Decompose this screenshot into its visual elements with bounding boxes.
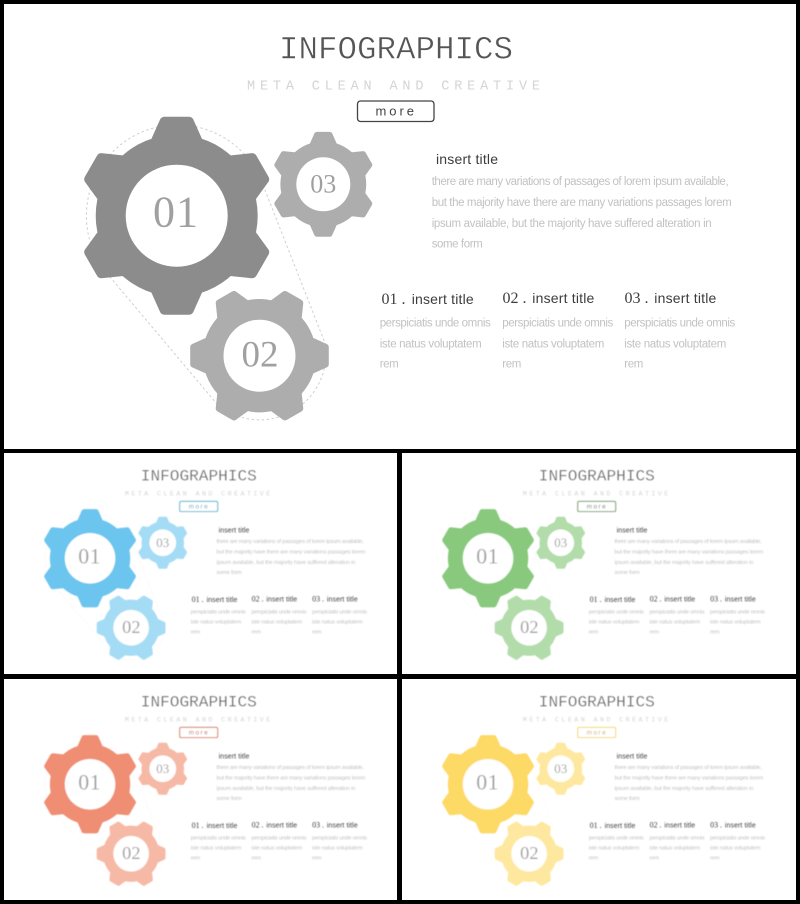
text block: column 03: iste natus voluptatem: [624, 338, 726, 350]
text block: insert title: ipsum available, but the majority have suffered alteration in: [217, 560, 355, 566]
text block: column 03: [624, 290, 736, 371]
text block: column 01: insert title: [412, 291, 474, 307]
text block: column 01: [191, 595, 246, 636]
text block: column 02: perspiciatis unde omnis: [502, 318, 614, 330]
dashed outline around gears: [443, 513, 562, 660]
icon: gear 02: [84, 807, 178, 901]
icon: gear 03: 03: [310, 170, 336, 199]
panel: grey infographic: [4, 4, 796, 450]
text block: insert title: there are many variations of passages of lorem ipsum available,: [217, 765, 364, 771]
more button: [180, 727, 218, 738]
text block: column 02: [650, 821, 705, 862]
text block: column 01: 01 .: [590, 821, 602, 830]
text block: column 02: [502, 290, 614, 371]
title: INFOGRAPHICS: [141, 693, 257, 711]
text block: column 02: 02 .: [502, 290, 526, 307]
panel: yellow infographic: [402, 679, 796, 901]
text block: column 03: perspiciatis unde omnis: [624, 318, 736, 330]
text block: column 02: [252, 595, 307, 636]
text block: column 01: perspiciatis unde omnis: [589, 835, 644, 841]
text block: column 01: iste natus voluptatem: [191, 846, 242, 852]
icon: gear 02: 02: [122, 617, 141, 637]
text block: column 01: iste natus voluptatem: [380, 338, 482, 350]
text block: column 01: rem: [380, 359, 399, 371]
icon: gear 02: [482, 807, 576, 901]
text block: insert title: there are many variations of passages of lorem ipsum available,: [615, 765, 762, 771]
text block: column 03: perspiciatis unde omnis: [312, 609, 367, 615]
text block: column 02: insert title: [664, 823, 695, 830]
text block: insert title: [432, 151, 732, 250]
text block: insert title: ipsum available, but the majority have suffered alteration in: [217, 786, 355, 792]
title: INFOGRAPHICS: [279, 32, 513, 68]
text block: insert title: [217, 754, 366, 802]
text block: column 03: insert title: [654, 290, 717, 306]
text block: column 02: [650, 595, 705, 636]
icon: gear 01: 01: [78, 545, 101, 569]
subtitle: META CLEAN AND CREATIVE: [247, 79, 540, 94]
title: INFOGRAPHICS: [539, 467, 655, 485]
text block: column 03: 03 .: [710, 595, 722, 604]
text block: column 01: perspiciatis unde omnis: [589, 609, 644, 615]
text block: insert title: insert title: [617, 528, 648, 535]
text block: column 03: iste natus voluptatem: [312, 846, 363, 852]
text block: column 02: 02 .: [252, 821, 264, 830]
text block: column 03: 03 .: [312, 821, 324, 830]
text block: column 02: insert title: [532, 290, 595, 306]
text block: column 03: iste natus voluptatem: [710, 846, 761, 852]
text block: insert title: some form: [432, 238, 483, 250]
text block: column 03: perspiciatis unde omnis: [710, 609, 765, 615]
title: INFOGRAPHICS: [539, 693, 655, 711]
title: INFOGRAPHICS: [141, 467, 257, 485]
text block: insert title: [615, 754, 764, 802]
text block: column 03: 03 .: [710, 821, 722, 830]
text block: insert title: there are many variations of passages of lorem ipsum available,: [217, 539, 364, 545]
panel: green infographic: [402, 453, 796, 675]
more button: [180, 501, 218, 512]
text block: column 02: insert title: [266, 597, 297, 604]
text block: column 03: insert title: [327, 823, 358, 830]
icon: gear 01: [77, 117, 276, 315]
text block: column 01: 01 .: [590, 595, 602, 604]
icon: gear 03: 03: [156, 762, 169, 776]
icon: gear 01: 01: [476, 771, 499, 795]
text block: column 02: 02 .: [650, 595, 662, 604]
text block: insert title: but the majority have there are many variations passages lorem: [217, 549, 366, 555]
icon: gear 02: 02: [520, 617, 539, 637]
icon: gear 03: 03: [156, 536, 169, 550]
text block: column 01: rem: [589, 630, 598, 636]
text block: column 01: insert title: [207, 597, 237, 604]
text block: column 02: iste natus voluptatem: [252, 846, 302, 852]
panel: red infographic: [4, 679, 397, 901]
text block: column 01: 01 .: [192, 821, 204, 830]
dashed outline around gears: [86, 125, 326, 420]
text block: column 03: rem: [312, 856, 322, 862]
more button: more: [376, 104, 414, 118]
text block: insert title: insert title: [219, 528, 250, 535]
text block: column 01: [380, 291, 491, 371]
text block: column 03: 03 .: [312, 595, 324, 604]
text block: column 01: perspiciatis unde omnis: [191, 835, 246, 841]
icon: gear 03: [137, 743, 189, 795]
text block: column 03: insert title: [725, 597, 756, 604]
text block: insert title: insert title: [219, 754, 250, 761]
text block: column 03: rem: [624, 359, 643, 371]
text block: column 02: rem: [252, 630, 261, 636]
text block: column 01: 01 .: [382, 291, 406, 308]
text block: column 01: [589, 821, 644, 862]
text block: column 02: perspiciatis unde omnis: [252, 835, 307, 841]
icon: gear 02: [84, 581, 178, 675]
text block: column 02: perspiciatis unde omnis: [650, 835, 705, 841]
more button: more: [587, 504, 606, 511]
text block: insert title: some form: [615, 796, 640, 802]
icon: gear 01: 01: [78, 771, 101, 795]
text block: column 01: rem: [589, 856, 598, 862]
text block: column 01: insert title: [207, 823, 237, 830]
more button: more: [189, 730, 208, 737]
dashed outline around gears: [45, 739, 164, 886]
icon: gear 01: [439, 509, 537, 607]
text block: column 01: iste natus voluptatem: [589, 846, 640, 852]
icon: gear 01: [41, 735, 139, 833]
text block: column 03: iste natus voluptatem: [312, 620, 363, 626]
dashed outline around gears: [45, 513, 164, 660]
subtitle: META CLEAN AND CREATIVE: [125, 717, 270, 725]
text block: column 03: insert title: [725, 823, 756, 830]
text block: column 02: insert title: [266, 823, 297, 830]
icon: gear 02: 02: [242, 335, 278, 376]
text block: column 03: rem: [312, 630, 322, 636]
text block: insert title: insert title: [617, 754, 648, 761]
icon: gear 01: 01: [153, 188, 199, 237]
text block: column 03: perspiciatis unde omnis: [312, 835, 367, 841]
subtitle: META CLEAN AND CREATIVE: [523, 491, 668, 499]
text block: column 02: iste natus voluptatem: [650, 846, 700, 852]
icon: gear 03: [137, 517, 189, 569]
icon: gear 03: [271, 132, 376, 237]
text block: insert title: ipsum available, but the majority have suffered alteration in: [615, 560, 753, 566]
text block: insert title: [217, 528, 366, 576]
text block: insert title: but the majority have there are many variations passages lorem: [432, 197, 732, 209]
text block: column 02: perspiciatis unde omnis: [650, 609, 705, 615]
icon: gear 03: [535, 517, 587, 569]
text block: column 03: 03 .: [624, 290, 648, 307]
text block: column 03: insert title: [327, 597, 358, 604]
text block: column 03: [710, 821, 765, 862]
panel: blue infographic: [4, 453, 397, 675]
text block: column 03: [312, 595, 367, 636]
text block: insert title: ipsum available, but the majority have suffered alteration in: [615, 786, 753, 792]
text block: column 02: insert title: [664, 597, 695, 604]
text block: column 02: 02 .: [252, 595, 264, 604]
icon: gear 02: 02: [122, 843, 141, 863]
text block: column 03: [710, 595, 765, 636]
text block: column 01: insert title: [605, 597, 635, 604]
text block: column 02: iste natus voluptatem: [502, 338, 604, 350]
text block: insert title: but the majority have there are many variations passages lorem: [615, 775, 764, 781]
text block: column 03: [312, 821, 367, 862]
text block: column 01: perspiciatis unde omnis: [380, 318, 491, 330]
text block: column 03: rem: [710, 856, 720, 862]
icon: gear 01: [439, 735, 537, 833]
text block: column 02: rem: [252, 856, 261, 862]
subtitle: META CLEAN AND CREATIVE: [523, 717, 668, 725]
text block: column 02: rem: [502, 359, 521, 371]
text block: insert title: there are many variations of passages of lorem ipsum available,: [615, 539, 762, 545]
icon: gear 03: 03: [554, 536, 567, 550]
more button: more: [587, 730, 606, 737]
icon: gear 02: 02: [520, 843, 539, 863]
more button: more: [189, 504, 208, 511]
text block: insert title: but the majority have there are many variations passages lorem: [615, 549, 764, 555]
icon: gear 01: 01: [476, 545, 499, 569]
more button: [358, 101, 434, 122]
text block: insert title: some form: [615, 570, 640, 576]
text block: column 01: 01 .: [192, 595, 204, 604]
text block: column 03: iste natus voluptatem: [710, 620, 761, 626]
icon: gear 02: [482, 581, 576, 675]
more button: [578, 501, 616, 512]
text block: column 01: rem: [191, 856, 200, 862]
icon: gear 01: [41, 509, 139, 607]
text block: column 03: rem: [710, 630, 720, 636]
text block: insert title: some form: [217, 796, 242, 802]
more button: [578, 727, 616, 738]
dashed outline around gears: [443, 739, 562, 886]
text block: column 02: [252, 821, 307, 862]
text block: column 03: perspiciatis unde omnis: [710, 835, 765, 841]
text block: column 02: perspiciatis unde omnis: [252, 609, 307, 615]
text block: column 02: iste natus voluptatem: [252, 620, 302, 626]
text block: column 01: perspiciatis unde omnis: [191, 609, 246, 615]
text block: column 02: 02 .: [650, 821, 662, 830]
text block: column 01: [589, 595, 644, 636]
subtitle: META CLEAN AND CREATIVE: [125, 491, 270, 499]
text block: column 01: iste natus voluptatem: [191, 620, 242, 626]
text block: insert title: but the majority have there are many variations passages lorem: [217, 775, 366, 781]
text block: insert title: some form: [217, 570, 242, 576]
text block: column 01: insert title: [605, 823, 635, 830]
text block: insert title: ipsum available, but the majority have suffered alteration in: [432, 218, 712, 230]
text block: column 02: iste natus voluptatem: [650, 620, 700, 626]
text block: column 02: rem: [650, 856, 659, 862]
text block: insert title: [615, 528, 764, 576]
text block: insert title: insert title: [436, 151, 498, 167]
text block: insert title: there are many variations of passages of lorem ipsum available,: [432, 176, 729, 188]
icon: gear 03: [535, 743, 587, 795]
text block: column 01: rem: [191, 630, 200, 636]
text block: column 01: iste natus voluptatem: [589, 620, 640, 626]
text block: column 02: rem: [650, 630, 659, 636]
text block: column 01: [191, 821, 246, 862]
icon: gear 02: [165, 261, 354, 450]
icon: gear 03: 03: [554, 762, 567, 776]
